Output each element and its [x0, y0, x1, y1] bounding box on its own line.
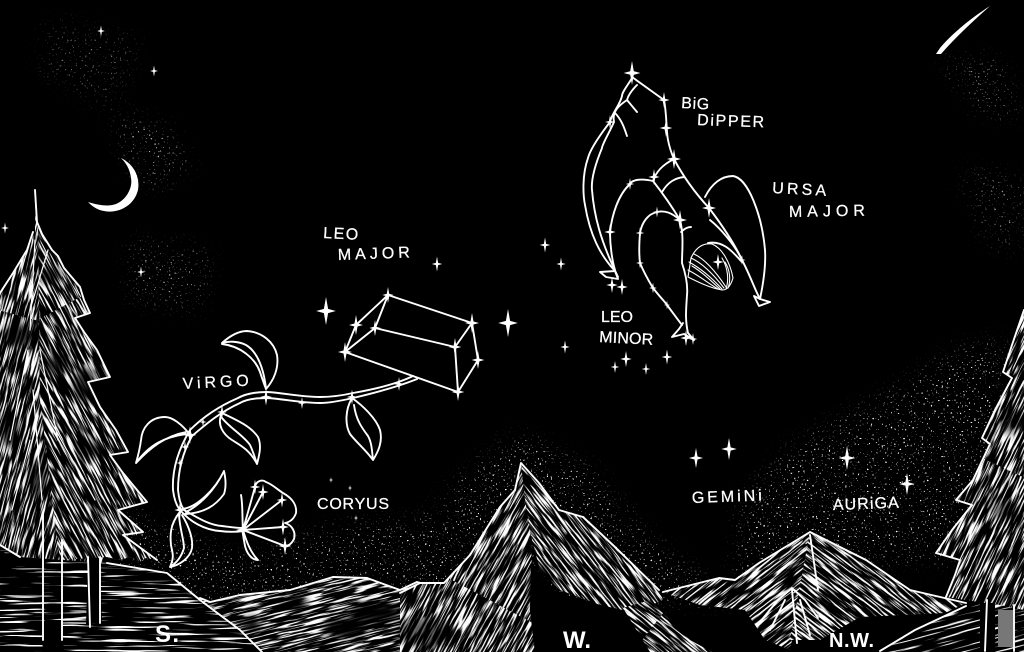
label: Leo Major: LEO: [323, 225, 359, 244]
second mountain range (north-west): [663, 532, 966, 650]
main peak mountain (west): [397, 463, 712, 652]
label: north-west: N.W.: [829, 630, 874, 652]
label: Big Dipper: [681, 95, 764, 131]
left pine tree: [0, 190, 157, 600]
right pine tree: [936, 310, 1024, 612]
label: Gemini: GEMiNi: [692, 488, 762, 507]
icon: crescent moon: [88, 158, 138, 212]
label: Corvus: CORYUS: [317, 496, 389, 513]
constellation: Leo Major box: [338, 287, 484, 401]
constellation: Leo Minor stars: [611, 350, 672, 375]
label: Big Dipper: BiG: [681, 95, 710, 113]
low foothills between south and west: [200, 577, 470, 652]
label: Big Dipper: DiPPER: [697, 112, 764, 131]
label: Ursa Major: MAJOR: [789, 203, 865, 221]
label: Leo Minor: LEO: [601, 309, 633, 326]
label: Ursa Major: [772, 180, 865, 221]
label: Auriga: AURiGA: [833, 495, 899, 514]
label: Leo Major: MAJOR: [338, 244, 410, 264]
ground: right slope and trunk: [880, 600, 1024, 652]
scattered sky stars: [1, 26, 915, 521]
constellation: Ursa Major and Big Dipper: [583, 61, 770, 346]
ground under left tree with trunks: [0, 513, 262, 652]
label: Ursa Major: URSA: [772, 180, 827, 200]
label: Virgo: ViRGO: [182, 373, 249, 393]
label: south: S.: [155, 621, 179, 648]
constellation: Virgo: [136, 331, 417, 567]
icon: shooting star: [936, 6, 990, 54]
label: Leo Major: [323, 225, 410, 264]
label: Leo Minor: [599, 309, 654, 349]
label: Leo Minor: MINOR: [599, 329, 654, 349]
